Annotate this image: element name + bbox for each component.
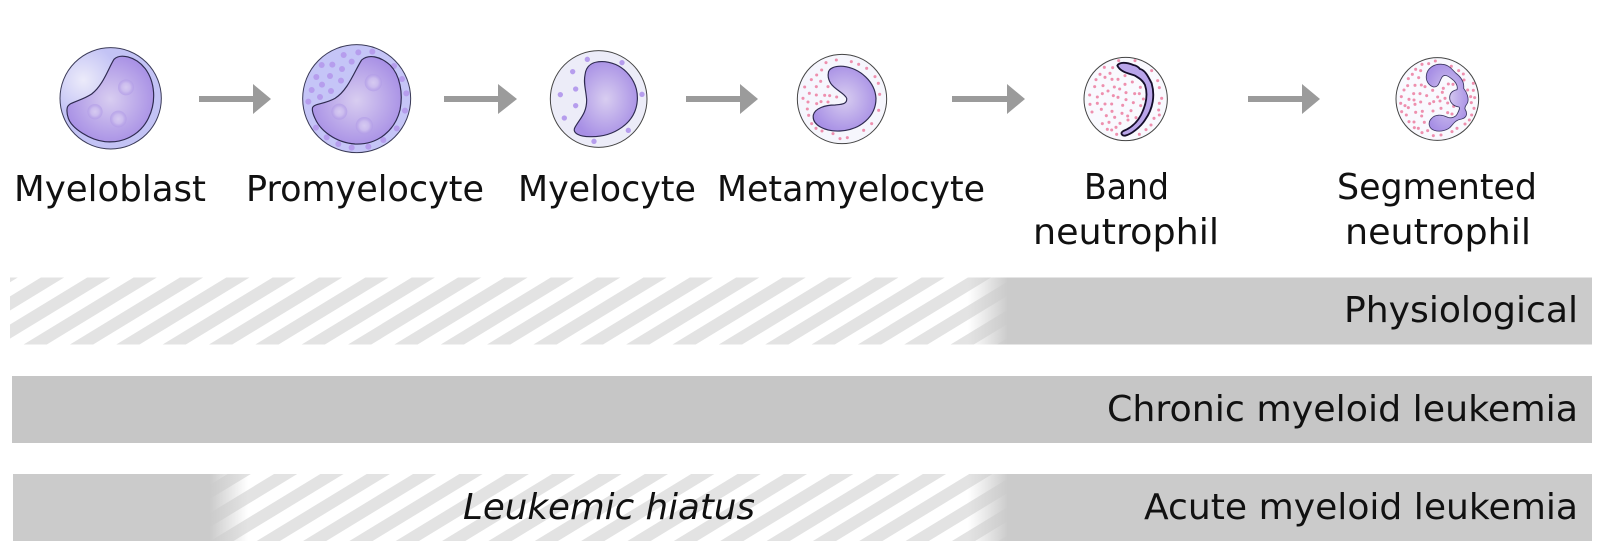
label: Segmented neutrophil: Segmented	[1337, 167, 1537, 208]
cell: metamyelocyte	[797, 54, 887, 144]
cytoplasm	[797, 54, 887, 144]
granules	[1399, 59, 1476, 137]
bar: acute myeloid leukemia	[13, 474, 1592, 541]
label: Promyelocyte: Promyelocyte	[246, 169, 484, 210]
label: Acute myeloid leukemia: Acute myeloid leukemia	[1144, 487, 1578, 528]
cell: band neutrophil	[1084, 57, 1167, 141]
cell: myeloblast	[60, 48, 161, 149]
label: Band neutrophil: neutrophil	[1033, 212, 1219, 253]
label: Leukemic hiatus: Leukemic hiatus	[463, 487, 755, 528]
label: Physiological: Physiological	[1344, 290, 1578, 331]
nucleus	[813, 66, 876, 131]
cytoplasm	[550, 51, 647, 147]
label: Myelocyte: Myelocyte	[518, 169, 696, 210]
nucleus	[67, 56, 154, 142]
cytoplasm	[1084, 57, 1167, 141]
nucleus	[574, 62, 637, 137]
arrow: promyelocyte to myelocyte	[444, 84, 517, 114]
bar: physiological	[0, 278, 1592, 344]
cell: segmented neutrophil	[1396, 58, 1479, 140]
label: Segmented neutrophil: neutrophil	[1345, 212, 1531, 253]
bar: chronic myeloid leukemia	[12, 376, 1592, 443]
nucleus	[312, 57, 401, 144]
label: Band neutrophil: Band	[1084, 167, 1169, 208]
granules	[1088, 59, 1163, 136]
arrow: metamyelocyte to band neutrophil	[952, 84, 1025, 114]
arrow: myelocyte to metamyelocyte	[686, 84, 758, 114]
cell: promyelocyte	[303, 45, 411, 153]
cytoplasm	[303, 45, 411, 153]
cell: myelocyte	[550, 51, 647, 147]
label: Myeloblast: Myeloblast	[14, 169, 206, 210]
label: Segmented neutrophil	[1337, 167, 1537, 253]
cytoplasm	[1396, 58, 1479, 140]
granules	[558, 57, 645, 144]
label: Band neutrophil	[1033, 167, 1219, 253]
granules	[801, 58, 881, 140]
label: Metamyelocyte: Metamyelocyte	[717, 169, 985, 210]
nucleus	[1426, 64, 1468, 131]
cytoplasm	[60, 48, 161, 149]
nucleus	[1117, 63, 1153, 136]
arrow: band to segmented neutrophil	[1248, 84, 1320, 114]
arrow: myeloblast to promyelocyte	[199, 84, 271, 114]
nucleoli	[331, 74, 382, 134]
granules	[305, 49, 409, 151]
label: Chronic myeloid leukemia: Chronic myeloid leukemia	[1107, 389, 1578, 430]
nucleoli	[87, 79, 134, 127]
